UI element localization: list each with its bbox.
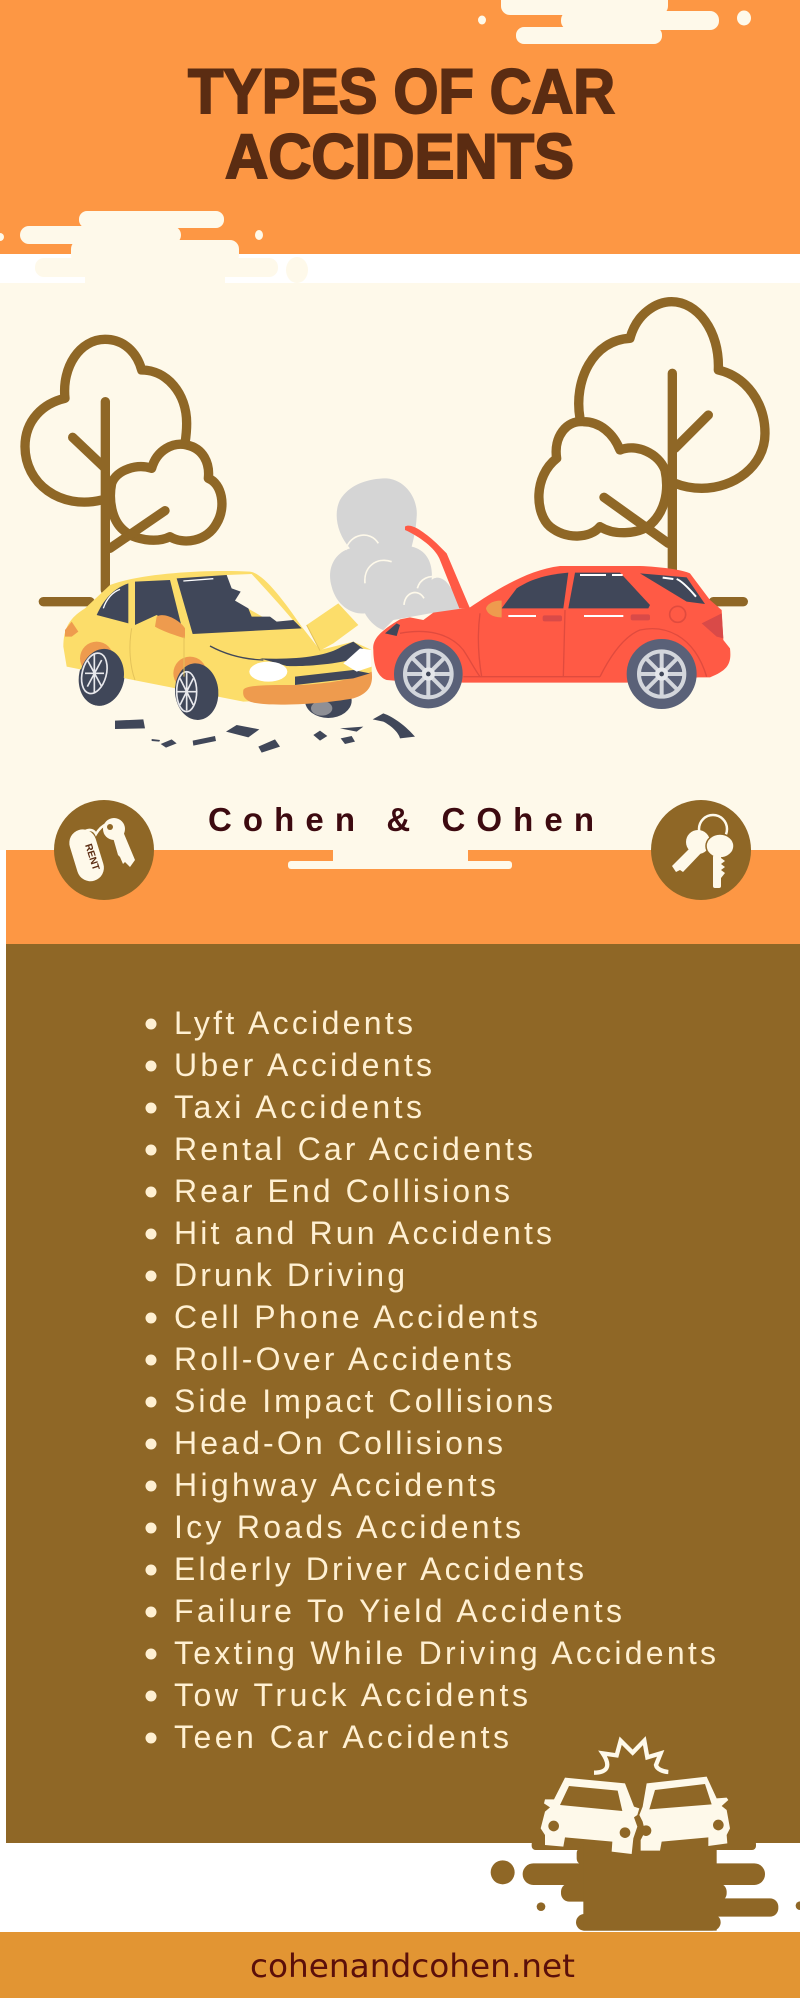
panel: cream illustration background xyxy=(0,283,800,850)
list of accident types: Highway Accidents xyxy=(174,1467,496,1503)
icon: rental key badge xyxy=(54,800,154,900)
list of accident types: Side Impact Collisions xyxy=(174,1383,553,1419)
smoke cloud xyxy=(330,478,460,630)
panel: footer bar xyxy=(0,1932,800,1998)
top clouds xyxy=(478,0,751,44)
list of accident types: Hit and Run Accidents xyxy=(174,1215,552,1251)
list of accident types: Rental Car Accidents xyxy=(174,1131,533,1167)
list of accident types: Failure To Yield Accidents xyxy=(174,1593,622,1629)
title xyxy=(188,57,615,192)
list of accident types: Texting While Driving Accidents xyxy=(174,1635,716,1671)
icon: key ring badge xyxy=(651,800,751,900)
list of accident types: Tow Truck Accidents xyxy=(174,1677,528,1713)
list of accident types: Taxi Accidents xyxy=(174,1089,422,1125)
illustration: crash scene xyxy=(25,302,765,753)
left tree xyxy=(25,339,222,602)
footer website: cohenandcohen.net xyxy=(250,1947,575,1985)
list of accident types: Drunk Driving xyxy=(174,1257,405,1293)
title: TYPES OF CAR xyxy=(188,57,615,127)
panel: orange header xyxy=(0,0,800,254)
list of accident types: Cell Phone Accidents xyxy=(174,1299,538,1335)
list of accident types: Lyft Accidents xyxy=(174,1005,413,1041)
list of accident types: Icy Roads Accidents xyxy=(174,1509,521,1545)
list of accident types: Teen Car Accidents xyxy=(174,1719,509,1755)
list of accident types: Roll-Over Accidents xyxy=(174,1341,512,1377)
list of accident types xyxy=(146,1005,716,1755)
list of accident types: Uber Accidents xyxy=(174,1047,432,1083)
icon: rental key badge: RENT xyxy=(82,843,101,872)
title: ACCIDENTS xyxy=(225,122,574,192)
red car xyxy=(373,526,730,709)
list of accident types: Head-On Collisions xyxy=(174,1425,503,1461)
wheels xyxy=(405,651,684,697)
debris xyxy=(115,713,415,753)
panel: brown list panel xyxy=(6,944,800,1843)
right tree xyxy=(539,302,765,602)
list of accident types: Elderly Driver Accidents xyxy=(174,1551,584,1587)
cream tab under company name xyxy=(288,850,512,869)
lower-left clouds xyxy=(0,211,308,284)
list of accident types: Rear End Collisions xyxy=(174,1173,510,1209)
panel: orange band xyxy=(6,850,800,944)
icon: collision cars with brown drips xyxy=(491,1741,800,1931)
yellow car xyxy=(63,571,372,722)
company name: Cohen & COhen xyxy=(208,801,594,838)
